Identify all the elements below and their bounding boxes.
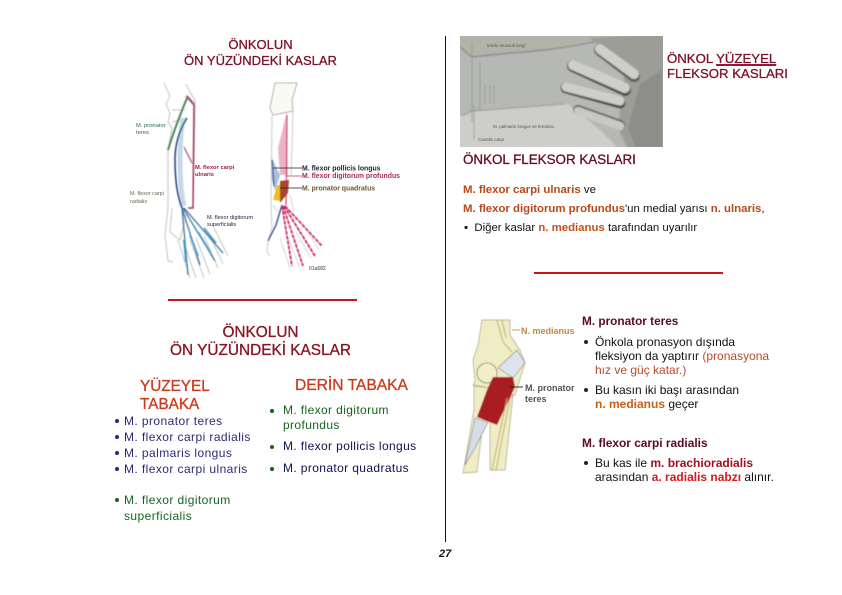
heading: m. flexor carpi radialis: M. flexor carpi radialis xyxy=(582,436,708,450)
blue muscle xyxy=(272,158,280,191)
text: innervation xyxy=(463,184,765,234)
list: superficial muscles: M. flexor carpi ulnaris xyxy=(124,462,248,476)
green pronator teres xyxy=(168,98,187,150)
list: superficialis: M. flexor digitorum xyxy=(124,493,231,507)
photo: forearm and hand: tendo musculi longi xyxy=(487,43,526,48)
list: superficial muscles: M. palmaris longus xyxy=(124,446,232,460)
text: Bu kasın iki başı arasından xyxy=(595,383,739,397)
anatomy illustration: forearm muscles: superficialis xyxy=(207,222,236,228)
heading: bottom left xyxy=(170,323,351,359)
heading: m. pronator teres: M. pronator teres xyxy=(582,314,678,328)
tendon top xyxy=(498,350,525,378)
text: pronator teres bullets: fleksiyon da yaptırır (pronasyona xyxy=(595,349,769,363)
anatomy illustration: forearm muscles: radialis xyxy=(130,199,147,205)
heading: yüzeyel tabaka: YÜZEYEL xyxy=(140,378,210,395)
radius xyxy=(463,386,492,473)
heading: önkol fleksor kasları: ÖNKOL FLEKSOR KASLARI xyxy=(463,152,636,167)
text: pronator teres bullets: hız ve güç katar.) xyxy=(595,363,686,377)
heading: top left: ÖN YÜZÜNDEKİ KASLAR xyxy=(184,53,337,68)
heading: yüzeyel tabaka: TABAKA xyxy=(140,396,199,413)
heading: bottom left: ÖNKOLUN xyxy=(222,324,299,341)
heading: yüzeyel tabaka xyxy=(140,377,210,413)
pink flexor carpi ulnaris xyxy=(187,96,194,208)
list: superficial muscles: M. flexor carpi radialis xyxy=(124,430,251,444)
capitulum xyxy=(477,363,497,383)
photo: forearm and hand: Canalis carpi xyxy=(478,137,504,142)
list: deep muscles xyxy=(283,403,389,432)
list: superficialis: superficialis xyxy=(124,509,192,523)
anatomy illustration: forearm muscles: M. flexor carpi xyxy=(195,165,235,171)
text: innervation: M. flexor carpi ulnaris ve xyxy=(463,184,596,196)
illustration: pronator teres elbow: N. medianus xyxy=(521,326,575,336)
humerus xyxy=(473,320,525,395)
anatomy illustration: forearm muscles: 01a682 xyxy=(309,266,326,272)
nerve lines xyxy=(492,320,512,470)
list: deep muscles: M. flexor digitorum xyxy=(283,403,389,417)
red muscle xyxy=(477,377,515,425)
photo: forearm and hand xyxy=(460,36,663,147)
text: M. flexor pollicis longus xyxy=(283,439,417,453)
page number: 27 xyxy=(439,548,451,560)
red rule left xyxy=(168,299,357,301)
text: flexor carpi radialis bullets xyxy=(595,456,774,484)
list: superficialis xyxy=(124,493,231,523)
heading: bottom left: ÖN YÜZÜNDEKİ KASLAR xyxy=(170,342,351,359)
text: flexor carpi radialis bullets: Bu kas ile m. brachioradialis xyxy=(595,456,753,470)
anatomy illustration: forearm muscles: M. flexor carpi xyxy=(130,191,164,197)
yellow and brown quadratus xyxy=(273,185,283,201)
anatomy illustration: forearm muscles: M. pronator quadratus xyxy=(302,186,375,192)
text: flexor carpi radialis bullets: arasından a. radialis nabzı alınır. xyxy=(595,470,774,484)
pink muscle xyxy=(278,111,288,175)
anatomy illustration: forearm muscles: M. flexor digitorum profundus xyxy=(302,173,400,180)
text: innervation: ▪ Diğer kaslar n. medianus tarafından uyarılır xyxy=(464,222,697,234)
heading: yüzeyel fleksor xyxy=(667,51,788,81)
red rule right xyxy=(534,272,723,274)
text: n. medianus geçer xyxy=(595,397,698,411)
anatomy illustration: forearm muscles: M. flexor digitorum xyxy=(207,215,253,221)
anatomy illustration: forearm muscles: teres xyxy=(136,130,149,136)
vertical divider xyxy=(445,36,446,542)
left arm outline xyxy=(164,83,228,278)
lower tendon xyxy=(465,418,488,465)
heading: top left: ÖNKOLUN xyxy=(228,37,293,52)
text: innervation: M. flexor digitorum profundus'un medial yarısı n. ulnaris, xyxy=(463,203,765,215)
heading: yüzeyel fleksor: FLEKSOR KASLARI xyxy=(667,66,788,81)
list: deep muscles: profundus xyxy=(283,418,340,432)
blue superficialis xyxy=(180,118,184,206)
illustration: pronator teres elbow: M. pronator xyxy=(525,383,575,393)
digit tendons xyxy=(282,206,322,266)
ulna xyxy=(490,395,513,470)
heading: top left xyxy=(184,37,337,68)
list: superficial muscles xyxy=(124,414,251,476)
right labels xyxy=(273,168,302,188)
photo: forearm and hand: M. palmaris longus ve tendosu xyxy=(493,124,555,129)
text: pronator teres bullets: Önkola pronasyon dışında xyxy=(595,335,735,349)
heading: derin tabaka: DERİN TABAKA xyxy=(295,377,408,394)
text: M. pronator quadratus xyxy=(283,461,409,475)
right arm bones xyxy=(270,83,297,115)
list: superficial muscles: M. pronator teres xyxy=(124,414,223,428)
heading: yüzeyel fleksor: ÖNKOL YÜZEYEL xyxy=(667,51,776,66)
anatomy illustration: forearm muscles: M. flexor pollicis longus xyxy=(302,166,381,172)
palm xyxy=(591,36,663,147)
anatomy illustration: forearm muscles: ulnaris xyxy=(195,172,214,178)
text: pronator teres bullets xyxy=(595,335,770,377)
illustration: pronator teres elbow: teres xyxy=(525,394,547,404)
fingers xyxy=(566,49,634,126)
left labels: M. pronator xyxy=(136,123,166,129)
